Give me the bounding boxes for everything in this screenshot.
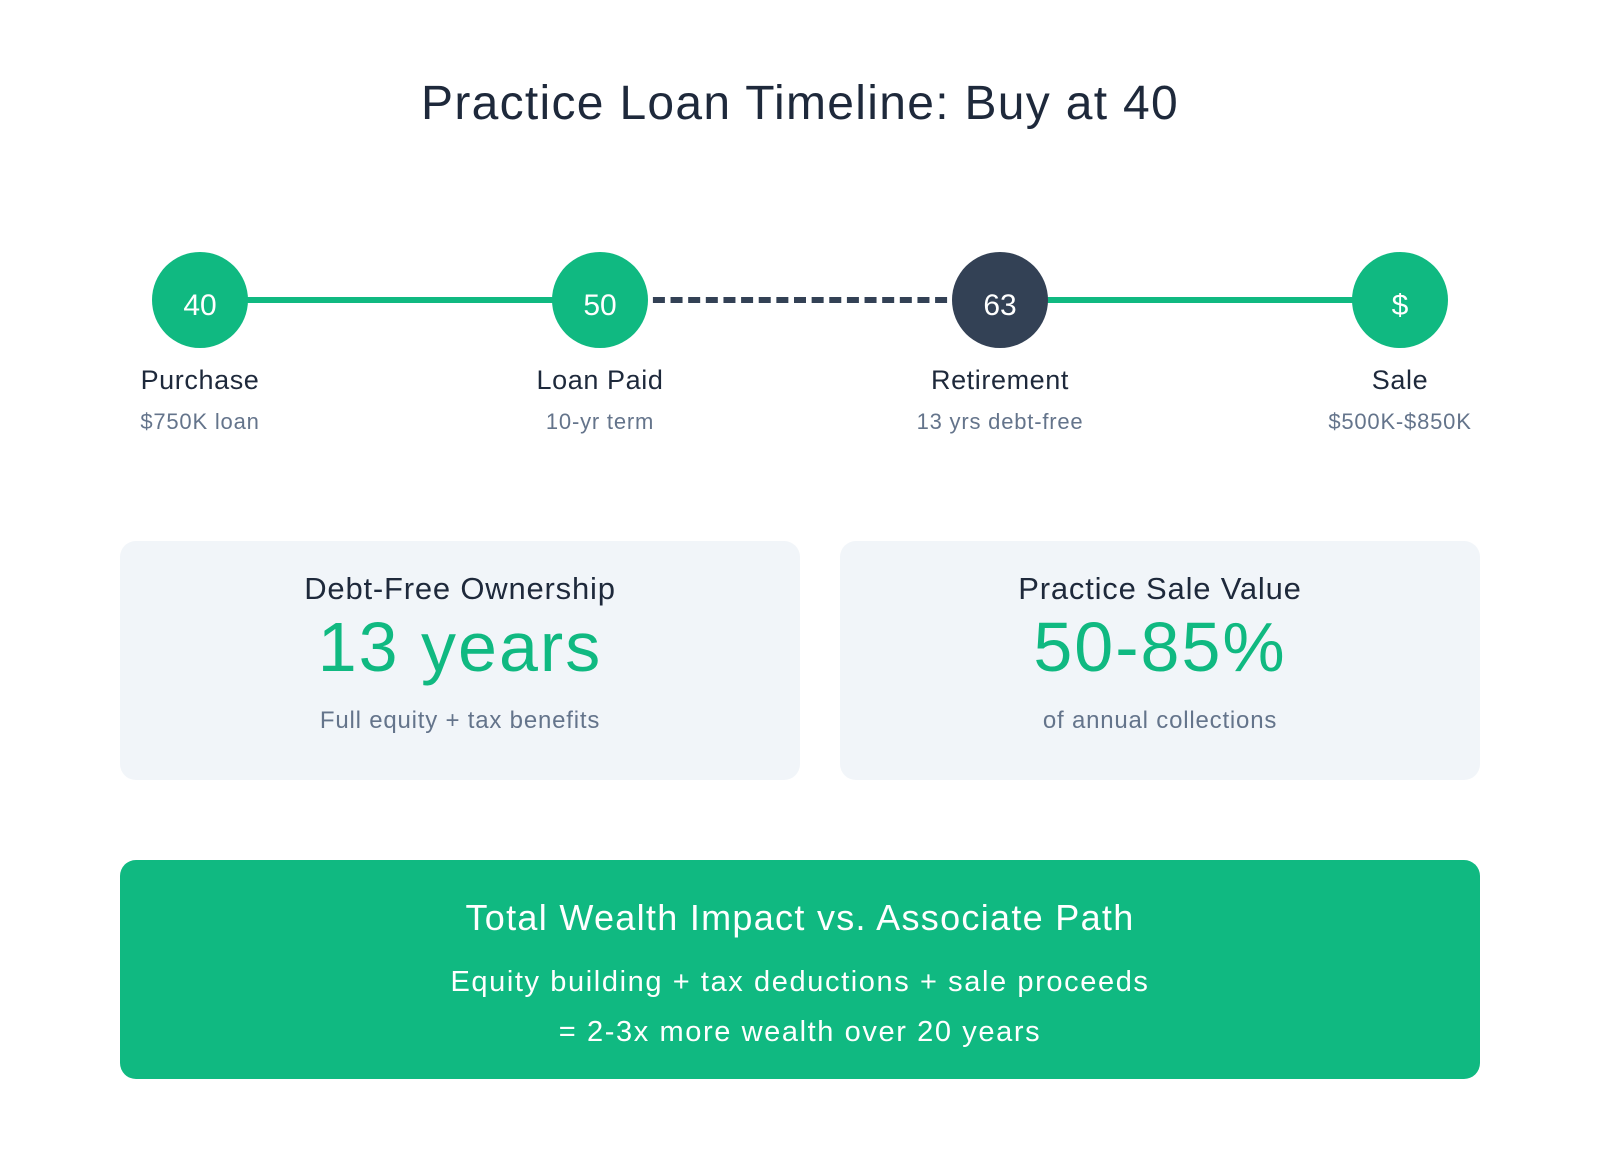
milestone: purchase — [152, 252, 248, 348]
panel: debt-free ownership: Full equity + tax benefits — [320, 707, 600, 734]
milestone: loan paid — [552, 252, 648, 348]
milestone: loan paid: 50 — [583, 289, 617, 322]
label: retirement: Retirement — [931, 365, 1069, 395]
milestone: sale — [1352, 252, 1448, 348]
callout: total wealth impact: Total Wealth Impact vs. Associate Path — [465, 897, 1135, 938]
milestone: sale: $ — [1392, 289, 1408, 322]
label: sale: Sale — [1372, 365, 1428, 395]
panel: practice sale value — [840, 541, 1480, 780]
solid line 1 — [200, 297, 600, 303]
sub: retirement: 13 yrs debt-free — [917, 409, 1083, 434]
label: loan paid: Loan Paid — [536, 365, 664, 395]
dashed line — [600, 297, 1000, 303]
sub: purchase: $750K loan — [140, 409, 260, 434]
sub: sale: $500K-$850K — [1328, 409, 1472, 434]
callout: total wealth impact: Equity building + tax deductions + sale proceeds — [450, 966, 1150, 998]
callout: total wealth impact — [120, 860, 1480, 1079]
milestone: purchase: 40 — [183, 289, 217, 322]
callout: total wealth impact: = 2-3x more wealth over 20 years — [559, 1016, 1041, 1048]
panel: practice sale value: of annual collections — [1043, 707, 1277, 734]
panel: debt-free ownership: 13 years — [318, 608, 602, 686]
panel: practice sale value: Practice Sale Value — [1018, 571, 1302, 606]
panel: debt-free ownership: Debt-Free Ownership — [304, 571, 616, 606]
solid line 2 — [1000, 297, 1400, 303]
milestone: retirement: 63 — [983, 289, 1017, 322]
milestone: retirement — [952, 252, 1048, 348]
timeline — [248, 297, 1352, 303]
title: Practice Loan Timeline: Buy at 40 — [421, 77, 1179, 130]
sub: loan paid: 10-yr term — [546, 409, 654, 434]
panel: practice sale value: 50-85% — [1033, 608, 1287, 686]
panel: debt-free ownership — [120, 541, 800, 780]
label: purchase: Purchase — [141, 365, 259, 395]
